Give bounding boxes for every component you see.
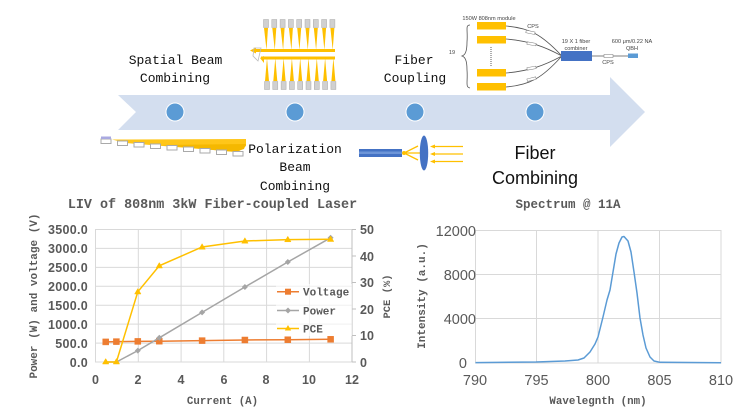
diagram: spatial beam combining	[250, 20, 336, 90]
x axis tick labels: 2	[135, 373, 142, 387]
left axis tick labels: 3000.0	[48, 242, 88, 256]
left axis tick labels: 2500.0	[48, 261, 88, 275]
chart: LIV curves	[29, 198, 394, 408]
series: power	[106, 235, 334, 362]
legend: PCE	[303, 324, 323, 336]
left axis tick labels: 3500.0	[48, 223, 88, 237]
label: polarization beam combining: Beam	[279, 160, 311, 175]
label: fiber coupling: Coupling	[384, 71, 446, 86]
left axis tick labels: 2000.0	[48, 280, 88, 294]
left axis tick labels: 1500.0	[48, 299, 88, 313]
label: spatial beam combining	[129, 53, 223, 86]
x axis tick labels: 6	[221, 373, 228, 387]
diagram: fiber coupling lens	[359, 136, 463, 170]
x axis tick labels: 810	[709, 373, 733, 389]
diagram: fiber combining schematic: QBH	[626, 46, 638, 52]
diagram: fiber combining schematic: combiner	[564, 46, 588, 52]
chart title: spectrum: Spectrum @ 11A	[515, 198, 621, 212]
left axis tick labels	[48, 223, 88, 370]
y axis title: Intensity (a.u.)	[417, 243, 429, 349]
diagram: polarization emitters and combined beam	[101, 136, 246, 156]
x axis tick labels: 795	[524, 373, 549, 389]
diagram: fiber combining schematic: CPS	[527, 24, 539, 30]
label: polarization beam combining: Combining	[260, 179, 330, 194]
left axis tick labels: 500.0	[55, 337, 88, 351]
right axis tick labels: 0	[360, 356, 367, 370]
diagram: fiber combining schematic: 600 μm/0.22 NA	[612, 39, 653, 45]
right axis tick labels: 10	[360, 329, 374, 343]
label: spatial beam combining: Combining	[140, 71, 210, 86]
legend: Power	[303, 306, 336, 318]
right axis tick labels: 30	[360, 276, 374, 290]
x axis tick labels	[463, 373, 733, 389]
diagram: fiber combining schematic: CPS	[602, 60, 614, 66]
left axis tick labels: 1000.0	[48, 318, 88, 332]
spectrum gridlines and frame	[476, 230, 721, 363]
y axis tick labels: 8000	[444, 268, 476, 284]
left axis tick labels: 0.0	[70, 356, 88, 370]
label: fiber combining: Combining	[492, 168, 578, 188]
x axis tick labels	[92, 373, 359, 387]
LIV plot gridlines and frame	[96, 230, 356, 362]
y axis tick labels: 4000	[444, 312, 476, 328]
legend: Voltage	[303, 288, 350, 300]
x axis tick labels: 805	[647, 373, 672, 389]
label: fiber coupling: Fiber	[394, 53, 434, 68]
process arrow	[118, 77, 645, 147]
diagram: fiber combining schematic: 150W 808nm module	[462, 16, 516, 22]
label: polarization beam combining	[248, 142, 342, 194]
label: fiber coupling	[384, 53, 446, 86]
x axis tick labels: 12	[345, 373, 359, 387]
diagram: fiber combining schematic: 19 X 1 fiber	[562, 39, 590, 45]
y axis tick labels: 12000	[436, 224, 476, 240]
x axis tick labels: 0	[92, 373, 99, 387]
label: fiber combining: Fiber	[514, 143, 556, 163]
x axis tick labels: 4	[178, 373, 185, 387]
label: fiber combining	[492, 143, 578, 188]
diagram: fiber combining schematic	[449, 16, 653, 90]
spectrum curve	[476, 236, 721, 363]
right axis title: PCE (%)	[382, 274, 394, 319]
legend	[276, 284, 352, 336]
y axis tick labels	[436, 224, 476, 372]
label: polarization beam combining: Polarization	[248, 142, 342, 157]
right axis tick labels	[360, 223, 374, 370]
chart title: LIV: LIV of 808nm 3kW Fiber-coupled Laser	[68, 198, 357, 213]
diagram: fiber combining schematic: 19	[449, 50, 455, 56]
x axis tick labels: 10	[302, 373, 316, 387]
label: spatial beam combining: Spatial Beam	[129, 53, 223, 68]
series: PCE	[102, 236, 334, 364]
right axis tick labels: 20	[360, 303, 374, 317]
series: voltage	[103, 336, 334, 345]
right axis tick labels: 40	[360, 250, 374, 264]
y axis tick labels: 0	[459, 356, 467, 372]
left axis title: Power (W) and voltage (V)	[29, 213, 41, 379]
x axis tick labels: 800	[586, 373, 610, 389]
x axis title: Wavelegnth (nm)	[549, 396, 647, 408]
x axis title: Current (A)	[187, 396, 258, 408]
right axis tick labels: 50	[360, 223, 374, 237]
x axis tick labels: 8	[263, 373, 270, 387]
chart: spectrum	[417, 198, 733, 408]
x axis tick labels: 790	[463, 373, 487, 389]
process step markers	[166, 103, 544, 121]
